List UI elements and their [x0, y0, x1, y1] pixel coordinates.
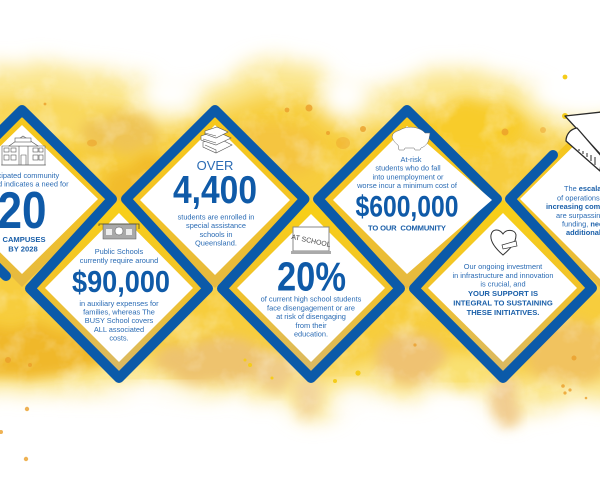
text: auxiliary expenses description: BUSY School covers	[85, 316, 154, 325]
icon: school building	[1, 136, 46, 165]
text: campuses by 2028: CAMPUSES	[2, 235, 46, 244]
number: $600,000: $600,000	[356, 190, 458, 224]
text: to our community: TO OUR COMMUNITY	[368, 224, 446, 232]
text: escalating costs description: additional	[566, 228, 600, 237]
number: 20%: 20%	[277, 254, 346, 300]
text: your support call to action: THESE INITIATIVES.	[467, 308, 539, 317]
text: at-risk students: students who do fall	[375, 164, 441, 172]
icon: laptop with at school screen: AT SCHOOL	[291, 234, 331, 249]
text: auxiliary expenses description: in auxiliary expenses for	[79, 299, 159, 308]
text: ongoing investment: Our ongoing investment	[464, 262, 542, 271]
text: students enrolled: schools in	[200, 230, 232, 239]
icon: piggy bank	[392, 127, 430, 150]
text: over: OVER	[197, 158, 233, 173]
text: auxiliary expenses description: ALL associated	[94, 325, 144, 334]
panel: campuses needed	[0, 125, 98, 274]
text: at-risk students: At-risk	[401, 155, 422, 164]
number: 4,400: 4,400	[173, 169, 257, 212]
text: your support call to action: YOUR SUPPORT IS	[468, 289, 538, 298]
text: students enrolled: Queensland.	[195, 238, 237, 248]
panel: disengagement	[237, 214, 385, 362]
icon: paper plane	[565, 112, 600, 171]
text: ongoing investment: in infrastructure and innovation	[452, 271, 554, 280]
text: public schools: currently require around	[80, 256, 158, 265]
icon: bandaged heart	[491, 230, 517, 255]
icon: laptop with at school screen	[291, 227, 331, 254]
text: at-risk students: worse incur a minimum cost of	[356, 181, 458, 190]
text: students enrolled: students are enrolled in	[178, 212, 254, 222]
icon: banknotes	[99, 224, 139, 239]
text: campuses by 2028: BY 2028	[8, 244, 38, 254]
gold diamond bands	[0, 111, 600, 376]
text: students enrolled: special assistance	[186, 221, 246, 230]
text: disengagement description: of current high school students	[261, 294, 362, 304]
text: auxiliary expenses description: families, whereas The	[83, 308, 155, 316]
icon: stack of books	[201, 127, 232, 153]
text: disengagement description: from their	[295, 321, 327, 330]
panel: cost of unemployment	[333, 126, 492, 274]
text: disengagement description: face disengagement or are	[267, 304, 355, 312]
blue zigzag frame	[0, 110, 592, 378]
text: ongoing investment: is crucial, and	[480, 280, 526, 288]
panel: auxiliary expenses	[45, 213, 193, 362]
text: public schools: Public Schools	[95, 247, 144, 256]
text: disengagement description: education.	[294, 330, 328, 338]
text: auxiliary expenses description: costs.	[109, 334, 129, 342]
panel: special assistance students	[140, 125, 290, 275]
panel: your support	[428, 213, 577, 362]
panel: escalating costs	[520, 120, 600, 279]
number: $90,000: $90,000	[72, 264, 170, 299]
text: disengagement description: at risk of disengaging	[276, 312, 346, 321]
text: your support call to action: INTEGRAL TO SUSTAINING	[453, 298, 553, 308]
text: at-risk students: into unemployment or	[372, 172, 444, 182]
